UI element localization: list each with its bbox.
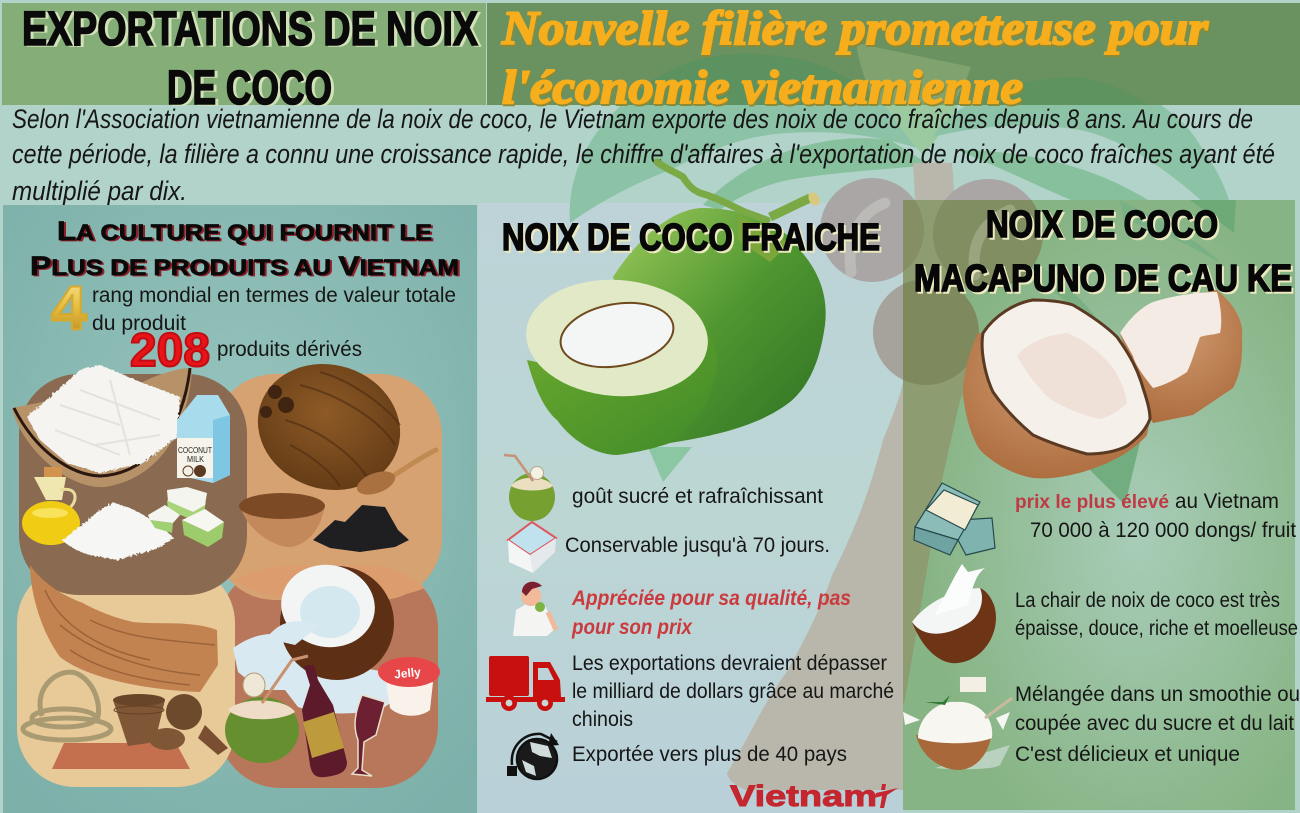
stat: derived products bbox=[130, 323, 362, 376]
panel: products bbox=[3, 205, 477, 813]
item: smoothie: Mélangée dans un smoothie ou bbox=[1015, 683, 1300, 706]
coconut milk carton: COCONUT bbox=[178, 446, 212, 455]
item: exports forecast: Les exportations devraient dépasser bbox=[572, 652, 887, 675]
panel: fresh coconut bbox=[486, 162, 898, 813]
coconut bowl bbox=[239, 493, 325, 547]
wine glass bbox=[352, 695, 385, 776]
illustration: green coconut bbox=[522, 162, 826, 455]
item: smoothie: coupée avec du sucre et du lait bbox=[1015, 712, 1294, 735]
coconut milk carton: MILK bbox=[187, 455, 205, 464]
heading: products bbox=[30, 216, 459, 281]
icon: money stacks bbox=[914, 483, 995, 555]
item: quality: pour son prix bbox=[571, 616, 693, 639]
panel palm overlay bbox=[903, 200, 1236, 704]
item: taste: goût sucré et rafraîchissant bbox=[572, 485, 823, 508]
stat: world rank: 4 bbox=[51, 274, 88, 343]
blob: beige bbox=[17, 565, 235, 787]
item: export countries bbox=[507, 733, 847, 779]
header: left band bbox=[2, 3, 486, 105]
icon: coconut milk splash bbox=[912, 564, 996, 663]
coconut jelly cubes bbox=[148, 487, 224, 547]
item: taste bbox=[504, 455, 823, 521]
blob overlap: terracotta top bbox=[235, 566, 425, 601]
logo: Vietnam+: Vietnam bbox=[730, 780, 877, 813]
coconut flakes pile bbox=[62, 503, 173, 560]
item: flesh bbox=[912, 564, 1298, 663]
panel: centre background bbox=[478, 203, 904, 813]
item: quality: Appréciée pour sa qualité, pas bbox=[571, 587, 851, 610]
item: exports forecast bbox=[486, 652, 894, 731]
stat: world rank: rang mondial en termes de valeur totale bbox=[92, 284, 456, 307]
icon: freezer bbox=[508, 522, 556, 573]
wine bottle bbox=[302, 665, 347, 777]
subtitle: Nouvelle filière prometteuse pour bbox=[501, 2, 1209, 55]
item: storage: Conservable jusqu'à 70 jours. bbox=[565, 534, 830, 557]
oil bottle bbox=[22, 467, 80, 545]
stat: world rank bbox=[51, 274, 456, 343]
item: smoothie bbox=[903, 677, 1300, 770]
stat: world rank: du produit bbox=[92, 312, 186, 335]
item: price: 70 000 à 120 000 dongs/ fruit bbox=[1030, 519, 1296, 542]
coir pots and discs bbox=[113, 694, 228, 755]
stat: derived products: 208 bbox=[130, 323, 210, 376]
coir husk bbox=[30, 565, 218, 692]
blob: tan bbox=[213, 374, 442, 600]
heading: macapuno bbox=[914, 204, 1292, 300]
charcoal bbox=[313, 505, 409, 552]
coconut water half coconut bbox=[233, 557, 420, 713]
icon: globe with arrow bbox=[507, 733, 559, 779]
background palm tree bbox=[570, 43, 1234, 790]
heading: products: LA CULTURE QUI FOURNIT LE bbox=[57, 216, 432, 246]
header: right band bbox=[487, 3, 1300, 105]
coconut milk carton bbox=[177, 395, 230, 483]
icon: coconut with straw bbox=[504, 455, 555, 521]
icon: man drinking bbox=[513, 582, 556, 636]
icon: delivery truck bbox=[486, 656, 565, 711]
stat: derived products: produits dérivés bbox=[217, 338, 362, 361]
panel: macapuno bbox=[903, 200, 1299, 810]
heading: products: PLUS DE PRODUITS AU VIETNAM bbox=[30, 251, 459, 281]
panel background bbox=[3, 205, 477, 813]
blob: brown bbox=[19, 374, 247, 595]
subtitle bbox=[501, 2, 1209, 114]
item: price: au Vietnam bbox=[1175, 490, 1279, 513]
wooden spoon bbox=[354, 450, 436, 499]
blob: terracotta bbox=[218, 566, 438, 788]
whole brown coconut bbox=[241, 346, 417, 508]
subtitle: l'économie vietnamienne bbox=[502, 61, 1023, 114]
heading: fresh coconut: NOIX DE COCO FRAICHE bbox=[502, 217, 880, 259]
jelly cup: Jelly bbox=[393, 665, 422, 682]
item: price: prix le plus élevé bbox=[1015, 492, 1169, 513]
coir rope bbox=[23, 672, 111, 740]
icon: coconut cream bowl bbox=[903, 677, 1012, 770]
item: exports forecast: le milliard de dollars grâce au marché bbox=[572, 680, 894, 703]
item: smoothie: C'est délicieux et unique bbox=[1015, 743, 1240, 766]
title: EXPORTATIONS DE NOIX bbox=[22, 3, 478, 56]
intro text bbox=[12, 104, 1275, 206]
logo: Vietnam+ bbox=[730, 780, 898, 813]
illustration: macapuno halves bbox=[963, 290, 1242, 478]
heading: macapuno: NOIX DE COCO bbox=[986, 204, 1218, 246]
panel background bbox=[903, 200, 1295, 810]
item: export countries: Exportée vers plus de 40 pays bbox=[572, 743, 847, 766]
mat bbox=[52, 743, 190, 769]
jelly cup bbox=[378, 657, 440, 716]
title bbox=[22, 3, 478, 115]
item: storage bbox=[508, 522, 830, 573]
drinking green coconut bbox=[225, 656, 308, 763]
item: quality bbox=[513, 582, 851, 639]
grated coconut shell bbox=[12, 365, 192, 487]
title: DE COCO bbox=[167, 62, 332, 115]
intro text: multiplié par dix. bbox=[12, 176, 187, 206]
item: price bbox=[914, 483, 1296, 555]
item: exports forecast: chinois bbox=[572, 708, 633, 731]
